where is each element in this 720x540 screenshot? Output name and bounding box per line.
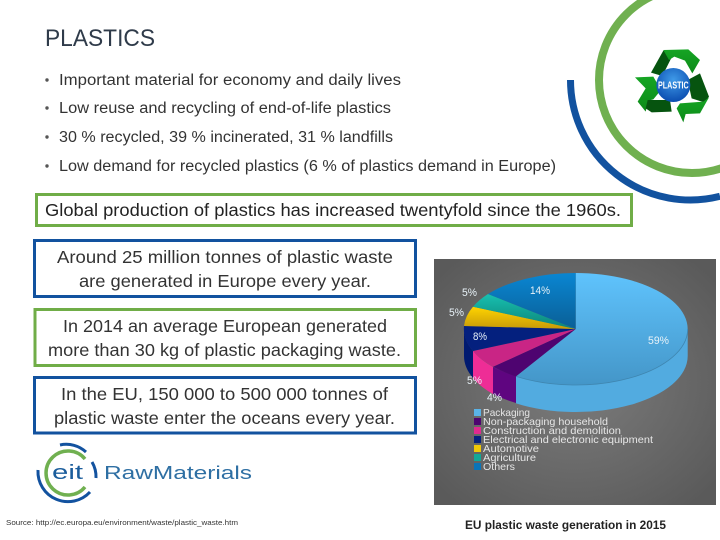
pie: value labels: 59% [648, 335, 669, 347]
callout: packaging waste [35, 310, 416, 366]
callout: oceans: In the EU, 150 000 to 500 000 tonnes of [61, 384, 388, 404]
pie: legend: Construction and demolition [483, 425, 621, 437]
bullet list: Low reuse and recycling of end-of-life plastics [59, 100, 391, 117]
callout: waste generated: are generated in Europe every year. [79, 271, 371, 291]
pie: value labels: 5% [449, 307, 464, 319]
pie: top faces [464, 273, 688, 385]
pie: value labels: 4% [487, 392, 502, 404]
pie: legend [474, 407, 653, 473]
bullet list: 30 % recycled, 39 % incinerated, 31 % landfills [59, 129, 393, 146]
pie: value labels: 5% [467, 375, 482, 387]
icon: plastic recycling symbol [635, 49, 709, 122]
callout: packaging waste: In 2014 an average European generated [63, 316, 387, 336]
chart caption: EU plastic waste generation in 2015 [465, 518, 666, 532]
pie: value labels: 14% [530, 285, 550, 297]
bullet list: Important material for economy and daily lives [59, 72, 401, 89]
logo: EIT RawMaterials: RawMaterials [104, 463, 252, 483]
decorative arc: blue [570, 80, 720, 200]
pie: value labels: 5% [462, 287, 477, 299]
pie chart panel [434, 259, 716, 505]
pie: value labels: 8% [473, 331, 487, 343]
callout: global production [36, 194, 632, 226]
source note: Source: http://ec.europa.eu/environment/waste/plastic_waste.htm [6, 518, 238, 527]
pie: legend: Electrical and electronic equipment [483, 434, 653, 446]
bullet list: Low demand for recycled plastics (6 % of plastics demand in Europe) [59, 158, 556, 175]
callout: oceans: plastic waste enter the oceans every year. [54, 408, 395, 428]
title: PLASTICS [45, 25, 155, 52]
pie: legend: Others [483, 461, 515, 473]
pie: legend: Agriculture [483, 452, 536, 464]
callout: packaging waste: more than 30 kg of plastic packaging waste. [48, 340, 401, 360]
decorative arc: green [599, 0, 720, 173]
callout: global production: Global production of plastics has increased twentyfold since the 1960s. [45, 200, 621, 220]
bullet list [45, 72, 556, 175]
callout: oceans [34, 378, 416, 433]
pie: value labels [449, 285, 669, 404]
callout: waste generated [34, 240, 416, 296]
pie: legend: Non-packaging household [483, 416, 608, 428]
callout: waste generated: Around 25 million tonnes of plastic waste [57, 247, 393, 267]
logo: EIT RawMaterials [38, 444, 252, 502]
pie: legend: Packaging [483, 407, 530, 419]
pie: side faces [464, 329, 688, 412]
logo: EIT RawMaterials: eit [52, 462, 84, 484]
pie: legend: Automotive [483, 443, 539, 455]
icon: plastic recycling symbol: PLASTIC [658, 81, 689, 92]
